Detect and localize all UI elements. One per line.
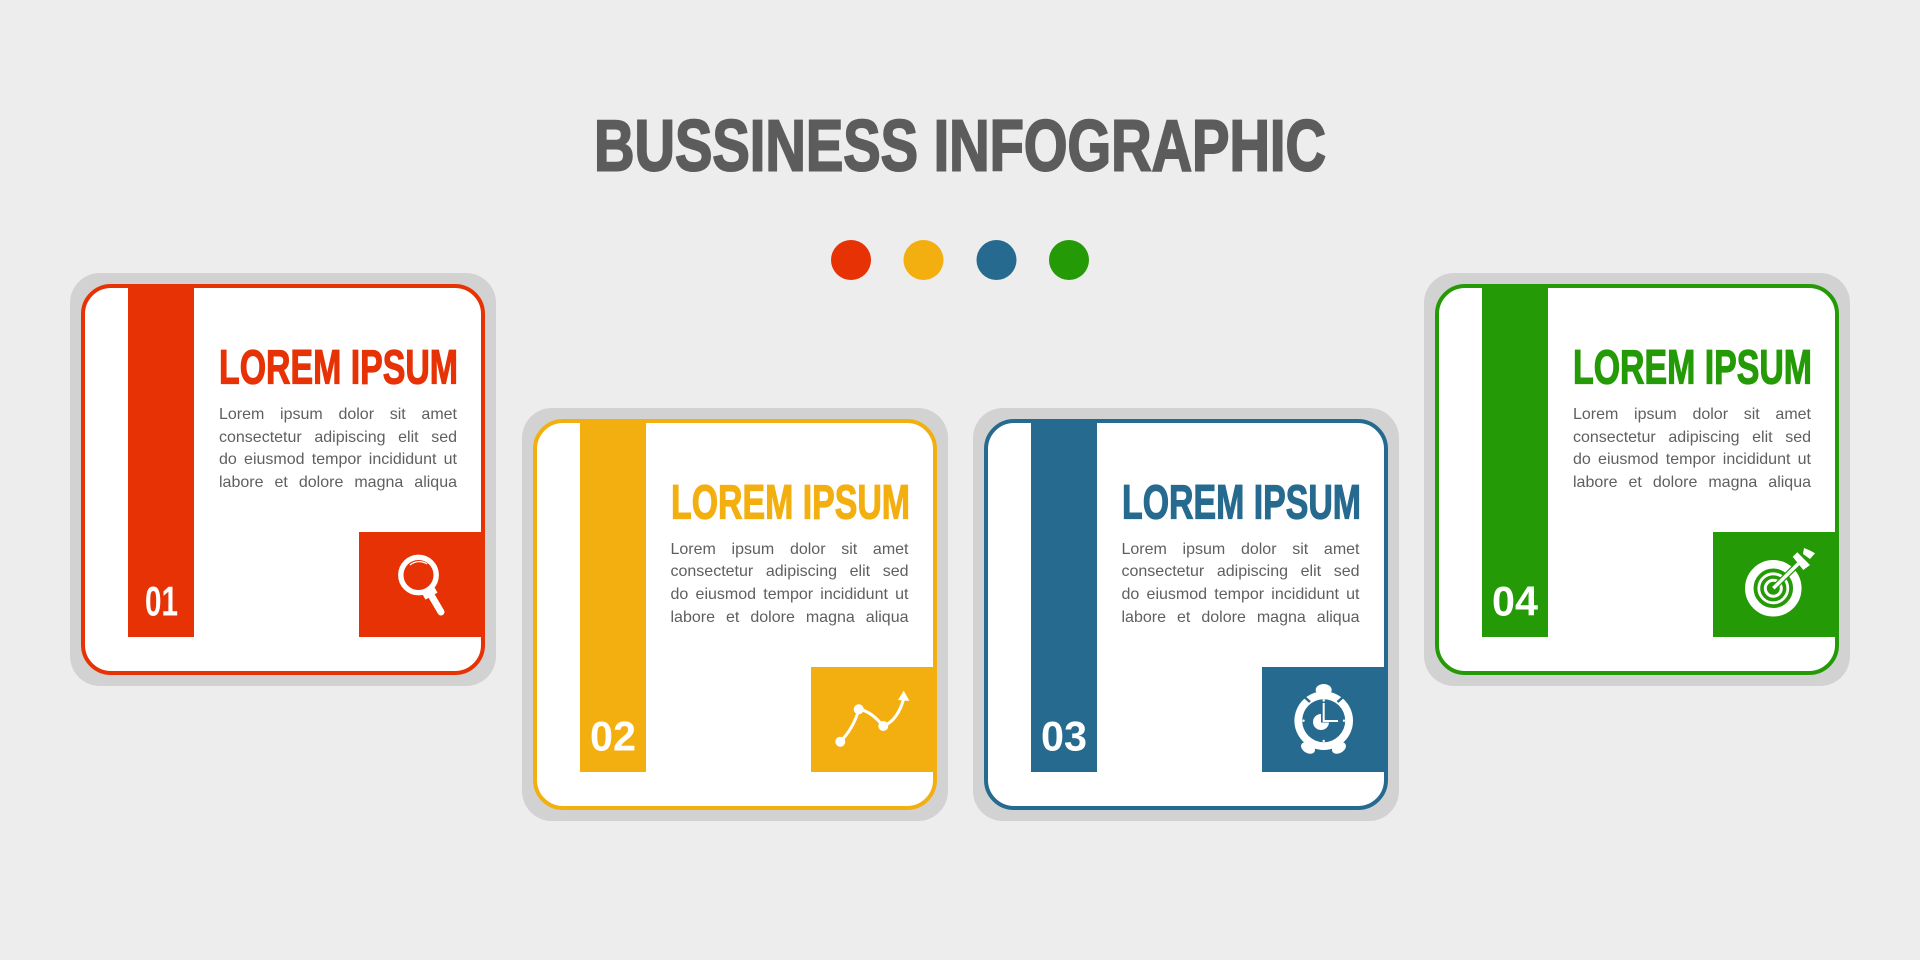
body text: labore et dolore magna aliqua bbox=[1573, 474, 1811, 491]
colour dots bbox=[831, 240, 1089, 280]
body text bbox=[1122, 540, 1360, 626]
number 02: 02 bbox=[590, 712, 636, 759]
body text: labore et dolore magna aliqua bbox=[219, 474, 457, 491]
body text: labore et dolore magna aliqua bbox=[670, 609, 908, 626]
body text bbox=[219, 406, 457, 491]
body text: consectetur adipiscing elit sed bbox=[670, 563, 908, 580]
body text bbox=[1573, 406, 1811, 491]
body text: do eiusmod tempor incididunt ut bbox=[670, 586, 908, 603]
body text: consectetur adipiscing elit sed bbox=[1122, 563, 1360, 580]
icon: alarm clock bbox=[1262, 666, 1388, 772]
body text: consectetur adipiscing elit sed bbox=[219, 429, 457, 446]
icon: growth chart bbox=[810, 666, 936, 772]
heading: LOREM IPSUM bbox=[670, 476, 910, 529]
number 01: 01 bbox=[145, 578, 178, 624]
body text: labore et dolore magna aliqua bbox=[1122, 609, 1360, 626]
heading: LOREM IPSUM bbox=[1573, 342, 1812, 394]
body text bbox=[670, 540, 908, 626]
body text: do eiusmod tempor incididunt ut bbox=[1573, 451, 1811, 468]
panel: card 02 bbox=[522, 408, 948, 820]
body text: consectetur adipiscing elit sed bbox=[1573, 429, 1811, 446]
icon: magnifying glass bbox=[359, 532, 485, 637]
panel: card 04 bbox=[1424, 273, 1850, 686]
heading: LOREM IPSUM bbox=[1122, 476, 1361, 529]
body text: Lorem ipsum dolor sit amet bbox=[1573, 406, 1811, 423]
panel: card 03 bbox=[972, 408, 1398, 820]
panel: card 01 bbox=[70, 273, 496, 686]
body text: do eiusmod tempor incididunt ut bbox=[1122, 586, 1360, 603]
heading: LOREM IPSUM bbox=[219, 342, 458, 394]
number 04: 04 bbox=[1492, 578, 1539, 624]
number 03: 03 bbox=[1040, 712, 1086, 759]
title: BUSSINESS INFOGRAPHIC bbox=[594, 106, 1326, 186]
body text: Lorem ipsum dolor sit amet bbox=[670, 540, 908, 558]
body text: Lorem ipsum dolor sit amet bbox=[219, 406, 457, 423]
body text: do eiusmod tempor incididunt ut bbox=[219, 451, 457, 468]
icon: target with dart bbox=[1713, 532, 1839, 637]
body text: Lorem ipsum dolor sit amet bbox=[1122, 540, 1360, 558]
